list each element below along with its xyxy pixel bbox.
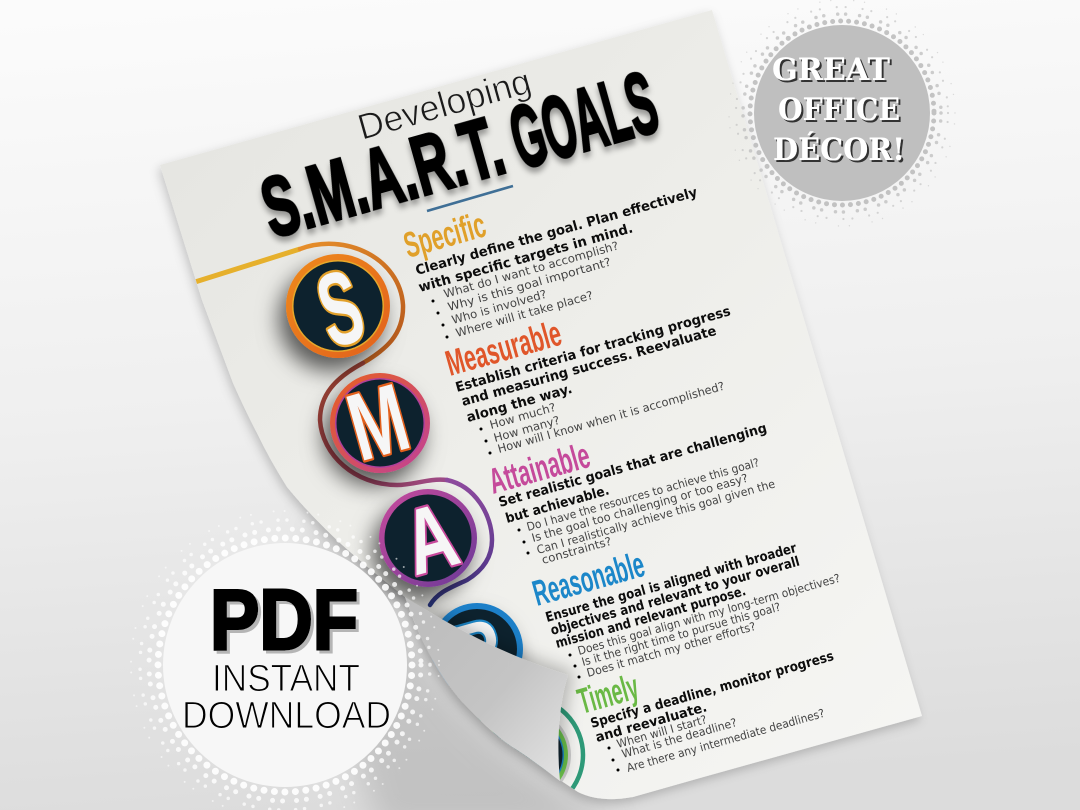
section: Specific: with specific targets in mind. <box>417 220 635 296</box>
section: Specific: What do I want to accomplish? <box>442 238 620 301</box>
section: Attainable: Do I have the resources to achieve this goal? <box>525 455 761 534</box>
badge text: DÉCOR! <box>773 130 905 168</box>
section: Specific: Where will it take place? <box>454 288 595 340</box>
section: Attainable: but achievable. <box>504 482 611 527</box>
page curl flap <box>405 597 568 781</box>
section: Timely: Specify a deadline, monitor progress <box>589 648 836 732</box>
section: Reasonable: Does it match my other efforts? <box>585 619 757 680</box>
section: Reasonable: mission and relevant purpose. <box>554 583 748 652</box>
PDF label: PDF <box>210 573 358 668</box>
circle: S: S <box>306 248 375 371</box>
section: Reasonable: objectives and relevant to your overall <box>549 554 801 639</box>
download label: DOWNLOAD <box>182 695 391 737</box>
section: Attainable <box>484 420 777 567</box>
circle: R: R <box>441 600 515 705</box>
section: Timely: Are there any intermediate deadlines? <box>625 706 826 775</box>
badge text: GREAT <box>772 52 890 88</box>
halftone dots <box>131 511 439 810</box>
section: Attainable: Can I realistically achieve this goal given the <box>535 477 777 557</box>
section: Specific: Who is involved? <box>450 287 548 327</box>
section: Specific: Clearly define the goal. Plan effectively <box>414 184 699 279</box>
title: GOALS: GOALS <box>499 52 668 187</box>
section: Timely <box>573 648 836 775</box>
badge: great office decor <box>729 0 955 226</box>
instant label: INSTANT <box>212 658 360 700</box>
title: Developing: Developing <box>353 60 536 148</box>
section: Attainable: Is the goal too challenging or too easy? <box>530 471 749 545</box>
section: Timely: When will I start? <box>615 712 708 751</box>
section: Attainable: Attainable <box>484 434 594 502</box>
section: Timely: What is the deadline? <box>620 715 738 761</box>
curve connector <box>195 244 492 605</box>
section: Measurable: How will I know when it is accomplished? <box>496 379 726 456</box>
section: Measurable: Measurable <box>441 312 566 384</box>
section: Measurable: How much? <box>488 400 557 432</box>
badge text: OFFICE <box>778 92 900 128</box>
section: Reasonable: Does this goal align with my long-term objectives? <box>576 571 842 658</box>
panel: poster sheet <box>160 10 922 810</box>
circle: T <box>478 706 586 790</box>
badge text <box>772 52 905 168</box>
section: Measurable: along the way. <box>465 381 574 426</box>
section: Measurable: How many? <box>492 413 561 445</box>
title underline <box>427 186 513 211</box>
section: Measurable: and measuring success. Reevaluate <box>460 323 718 410</box>
section: Timely: and reevaluate. <box>594 699 709 746</box>
halftone dots <box>729 0 955 226</box>
title: S.M.A.R.T.: S.M.A.R.T. <box>251 98 514 255</box>
section: Timely: Timely <box>573 666 643 722</box>
badge: PDF instant download <box>131 511 439 810</box>
section: Reasonable <box>528 540 842 680</box>
section: Specific: Why is this goal important? <box>446 255 613 314</box>
section: Measurable <box>441 303 732 456</box>
section: Attainable: Set realistic goals that are challenging <box>497 420 769 511</box>
section: Specific: Specific <box>399 204 490 266</box>
section: Attainable: constraints? <box>540 534 613 567</box>
circle: S <box>286 248 390 371</box>
section: Reasonable: Is it the right time to pursue this goal? <box>580 600 782 669</box>
circle: M: M <box>337 364 420 482</box>
section: Specific <box>399 184 699 340</box>
section: Measurable: Establish criteria for tracking progress <box>454 303 732 396</box>
circle: A: A <box>393 483 468 595</box>
section: Reasonable: Ensure the goal is aligned with broader <box>544 540 799 626</box>
section: Reasonable: Reasonable <box>528 543 649 614</box>
